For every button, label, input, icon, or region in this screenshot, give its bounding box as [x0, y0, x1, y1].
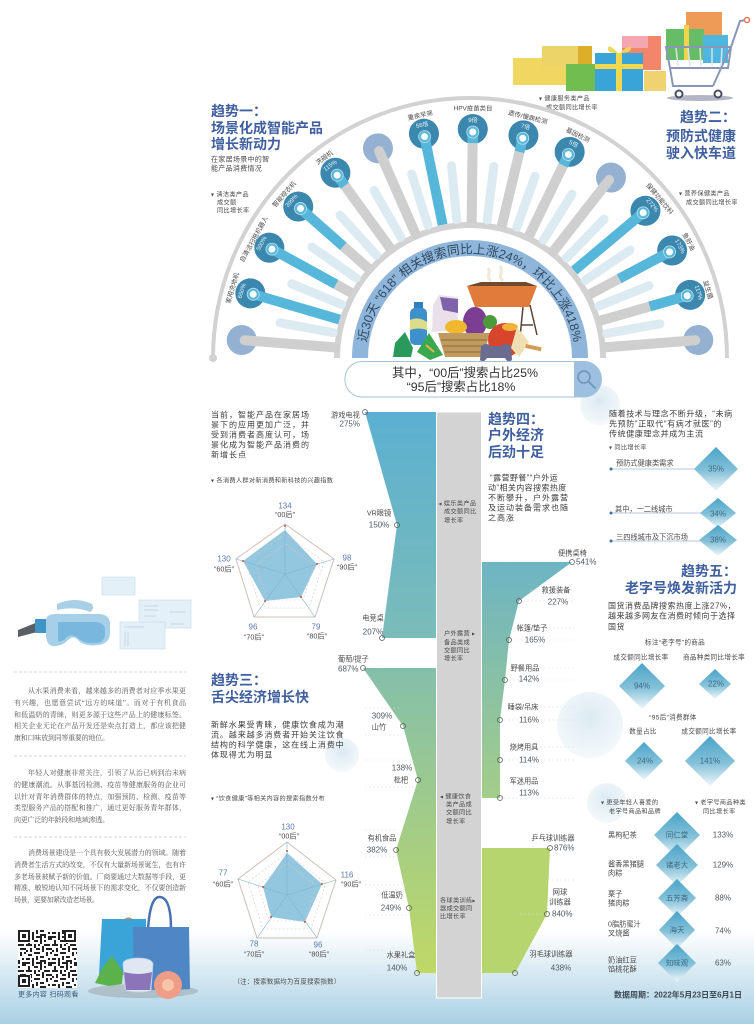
metrics: post-95 consumers: 141% [700, 756, 720, 766]
text: preventive health intro: 传统健康理念并成为主流 [609, 428, 704, 438]
spoke: 重疾早筛 56倍: 重疾早筛 [407, 108, 434, 122]
table headers: brands: ▾ 老字号商品种类 [695, 798, 746, 806]
text: trend 1 subtitle [211, 154, 269, 172]
metric: preventive health 35%: 预防式健康类需求 [616, 458, 674, 468]
text: commentary paragraph 3: 精准、敏锐地认知不同场景下的需求变化，不仅要创造新 [14, 883, 186, 893]
title: trend 1: 趋势一： [211, 103, 267, 119]
note: （注：搜索数据均为百度搜索指数） [233, 976, 341, 986]
illustration: barbecue, fruit basket and outdoor goods [393, 266, 542, 362]
search box: “95后”搜索占比18% [407, 379, 515, 394]
chart: healthy food funnel: 687% [338, 664, 358, 674]
text: trend 4 body: 及运动装备需求也随 [488, 502, 569, 512]
radar chart: interest index: 98 [343, 554, 352, 562]
column label: healthy food: 类产品成 [446, 800, 472, 808]
text: smart product intro [211, 410, 310, 460]
title: trend 3: 舌尖经济增长快 [211, 689, 309, 705]
spoke: 重疾早筛 56倍: 56倍 [415, 120, 429, 130]
chart: outdoor camping funnel: 睡袋/吊床 [508, 702, 538, 712]
spoke: 基因检测 5倍: 5倍 [568, 138, 580, 149]
ball and paddle [488, 323, 522, 357]
chart: healthy food funnel: 138% [392, 764, 412, 772]
milk carton [432, 295, 458, 332]
text: trend 4 body: 不断攀升，户外露营 [488, 492, 569, 502]
fan chart: product growth rates [209, 98, 727, 362]
text: smart product intro: 受到消费者高度认可，场 [211, 430, 310, 440]
chart: healthy food funnel: 枇杷 [394, 776, 408, 784]
table row: 海天: 叉烧酱 [608, 928, 630, 938]
spoke: 洗碗机 115%: 115% [323, 159, 339, 173]
title: trend 4: 趋势四： [488, 411, 544, 427]
search box: 其中，“00后”搜索占比25% [392, 365, 538, 380]
chart: healthy food funnel: 水果礼盒 [387, 950, 415, 960]
spoke: 益生菌 117% [596, 274, 717, 335]
text: commentary paragraph 3: 消费场景建设是一个具有极大发展潜力的领域。随着 [28, 848, 186, 857]
chart: ball trainers funnel: 训练器 [549, 898, 571, 906]
text: trend 3 body: 结构的科学健康，这在线上消费中 [211, 740, 344, 750]
spoke: HPV疫苗类目 9倍 [452, 103, 492, 223]
table row: 海天: 74% [715, 926, 731, 936]
text: trend 4 body: “露营野餐”“户外运 [490, 472, 558, 482]
spoke: 益生菌 117%: 益生菌 [701, 279, 716, 301]
divider lines, left column [14, 672, 186, 837]
spoke: 鱼肝油 173%: 鱼肝油 [680, 231, 697, 252]
metric: preventive health 35%: 35% [708, 464, 724, 474]
spoke: 智能晾衣机 399% [270, 179, 380, 281]
chart: outdoor camping funnel: 227% [548, 598, 568, 606]
spoke: 洗碗机 115%: 洗碗机 [314, 148, 335, 167]
metric: lower-tier cities 38% [610, 525, 737, 556]
text: preventive health intro: 先预防”正取代“有病才就医”的 [609, 418, 722, 428]
metrics: post-95 consumers: “95后”消费群体 [649, 712, 697, 722]
column label: entertainment: 成交额同比 [444, 508, 476, 516]
metrics: time-honored brand goods: 94% [634, 682, 650, 690]
text: smart product intro: 景下的应用更加广泛，并 [211, 420, 310, 430]
radar chart: interest index [214, 502, 358, 642]
metrics: time-honored brand goods: 成交额同比增长率 [613, 652, 669, 662]
metrics: time-honored brand goods: 标注“老字号”的商品 [645, 638, 705, 646]
spoke: HPV疫苗类目 9倍: 9倍 [468, 116, 478, 124]
chart: healthy food funnel: 低温奶 [381, 890, 403, 900]
chart: ball trainers funnel: 876% [554, 844, 574, 852]
illustration: gifts and shopping cart [513, 12, 750, 101]
text: commentary paragraph 2: 类型服务产品的搭配和推广，通过更好服务青年群体， [14, 803, 186, 813]
text: commentary paragraph 2: 的健康潮流。从事基因检测、疫苗等健康服务的企业可 [14, 780, 186, 789]
chart: ball trainers funnel: 羽毛球训练器 [529, 950, 573, 958]
title: trend 1: 增长新动力 [211, 136, 281, 152]
chart: entertainment products funnel: 游戏电视 [331, 410, 360, 420]
column label: entertainment [438, 500, 476, 524]
chart: healthy food funnel: 249% [381, 904, 401, 912]
page background gradient [0, 930, 754, 1024]
metrics: post-95 consumers: 数量占比 [629, 726, 657, 736]
column label: healthy food [440, 792, 472, 826]
data period: 数据周期：2022年5月23日至6月1日 [614, 990, 742, 1000]
radar chart: interest index: “70后” [244, 632, 265, 642]
metrics: time-honored brand goods [613, 638, 745, 709]
radar chart: interest index: 134 [278, 502, 292, 510]
table row: 海天 [608, 911, 731, 949]
column label: healthy food: 增长率 [446, 818, 465, 826]
chart: ball trainers funnel: 网球 [553, 888, 567, 896]
chart: ball trainers funnel [482, 834, 576, 976]
table row: 五芳斋: 五芳斋 [666, 894, 689, 902]
radar chart: food search index: 130 [281, 822, 295, 832]
text: trend 3 body: 新鲜水果受青睐，健康饮食成为潮 [211, 720, 344, 730]
illustration: shopping bags with zongzi, milk tea and pastry [88, 897, 198, 999]
column label: outdoor: 增长率 [444, 654, 463, 662]
metric: tier 1-2 cities 34%: 其中，一二线城市 [615, 504, 673, 514]
column label: ball trainers: 器成交额同 [440, 904, 472, 912]
title: trend 2 [666, 109, 736, 161]
legend: cleaning products: 同比增长率 [217, 206, 249, 214]
spoke: empty gray 2 [358, 129, 429, 240]
table row: 同仁堂 [608, 812, 733, 858]
spoke: 自清洁扫拖机器人 500% [237, 214, 364, 315]
chart: outdoor camping funnel: 帐篷/垫子 [517, 624, 547, 632]
table row: 同仁堂: 133% [713, 830, 733, 840]
text: preventive health intro: 随着技术与理念不断升级，“未病 [609, 408, 733, 418]
text: commentary paragraph 1: 相关企业无论在产品开发还是卖点打造上，都应该把健 [14, 721, 186, 731]
text: commentary paragraph 1: 康和口味放到同等重要的地位。 [14, 733, 109, 742]
table headers: brands: ▾ 更受年轻人喜爱的 [601, 798, 658, 806]
chart: entertainment products funnel: 275% [340, 420, 360, 428]
table row: 同仁堂: 同仁堂 [666, 830, 688, 840]
radar chart: interest index: “00后” [275, 510, 296, 519]
table row: 海天: 0脂肪蜜汁 [608, 920, 641, 928]
QR caption: 更多内容 扫码观看 [18, 990, 79, 998]
table row: 知味观 [608, 944, 731, 982]
metrics: time-honored brand goods: 商品种类同比增长率 [683, 652, 745, 662]
headline band: curved search growth text: 近30天 “618” 相关搜索同比上涨24%，环比上涨418% [356, 243, 582, 342]
decorative pale circles [325, 385, 627, 823]
text: commentary paragraph 2: 年轻人对健康非常关注，引领了从治已病到治未病 [28, 768, 186, 778]
legend: growth rate: ▾ 同比增长率 [609, 444, 647, 452]
spoke: 家用洗地机 650% [223, 271, 344, 335]
table row: 诸老大: 肉粽 [608, 868, 622, 878]
chart: ball trainers funnel: 840% [552, 910, 572, 918]
chart: ball trainers funnel: 438% [551, 964, 571, 972]
radar chart: food search index: “80后” [309, 950, 330, 958]
text: commentary paragraph 1: 和低温奶的青睐，则更多源于这些产品上的健康标签。 [14, 710, 186, 720]
chart: outdoor camping funnel: 军迷用品 [510, 776, 538, 786]
spoke: 遗传/慢病检测 7倍: 7倍 [520, 122, 531, 132]
column label: outdoor: 户外露营 ▸ [444, 630, 475, 638]
table row: 知味观: 馅桃花酥 [608, 964, 637, 974]
radar chart: food search index: “00后” [279, 832, 300, 840]
text: trend 3 body: 体现得尤为明显 [211, 750, 273, 760]
text: trend 5 body: 国货 [608, 622, 625, 632]
text: commentary paragraph 2: 以针对青年消费群体的特点，加强预防、检测、疫苗等 [14, 792, 186, 802]
title: trend 5: 趋势五： [681, 563, 737, 579]
spoke: 智能晾衣机 399%: 智能晾衣机 [270, 179, 298, 209]
column label: ball trainers [440, 896, 476, 920]
table row: 诸老大: 129% [713, 860, 733, 870]
chart: outdoor camping funnel: 114% [519, 756, 539, 764]
metrics: post-95 consumers [625, 712, 737, 786]
spoke: empty gray 3 [541, 156, 632, 261]
chart: outdoor camping funnel: 116% [519, 716, 539, 724]
chart: healthy food funnel: 葡萄/提子 [338, 654, 369, 664]
text: commentary paragraph 2: 向更广泛的年龄段和地域渗透。 [14, 815, 109, 824]
metrics: post-95 consumers: 24% [637, 756, 653, 766]
text: commentary paragraph 3 [14, 848, 186, 905]
spoke: 基因检测 5倍 [515, 124, 593, 243]
column label: entertainment: 增长率 [444, 516, 463, 524]
chart: outdoor camping funnel: 便携桌椅 [558, 548, 587, 558]
text: trend 5 body [608, 600, 736, 632]
text: commentary paragraph 3: 多老场景被赋予新的价值。厂商要通过大数据等手段，更 [14, 872, 186, 882]
inner arc [337, 225, 603, 358]
metric: preventive health 35% [610, 447, 738, 491]
table row: 诸老大: 酱香黑猪腿 [608, 860, 644, 868]
chart: outdoor camping funnel: 541% [576, 558, 596, 566]
table row: 海天: 海天 [670, 926, 685, 934]
text: trend 1 subtitle: 能产品消费情况 [211, 164, 262, 172]
spoke: 保健功能饮料 272%: 272% [644, 198, 659, 214]
chart: healthy food funnel [338, 654, 436, 976]
text: trend 1 subtitle: 在家居场景中的智 [211, 154, 269, 164]
chart: entertainment products funnel: 150% [369, 520, 389, 530]
spoke: 家用洗地机 650%: 家用洗地机 [223, 271, 241, 305]
legend: cleaning products: ▾ 清洁类产品 [211, 190, 249, 198]
radar chart: food search index: 116 [341, 870, 354, 880]
metric: lower-tier cities 38%: 三四线城市及下沉市场 [616, 532, 688, 542]
table row: 同仁堂: 黑枸杞茶 [608, 830, 637, 840]
text: trend 4 body: 动”相关内容搜索热度 [488, 482, 567, 492]
chart: healthy food funnel: 有机食品 [368, 834, 396, 842]
text: trend 5 body: 越来越多网友在消费时倾向于选择 [608, 610, 736, 620]
radar chart: food search index: 78 [250, 940, 259, 948]
chart: healthy food funnel: 382% [367, 846, 387, 854]
column label: entertainment: ◂ 娱乐类产品 [438, 500, 476, 508]
table row: 知味观: 63% [715, 958, 731, 968]
radar chart: food search index: 96 [314, 940, 323, 950]
table row: 五芳斋: 猪肉粽 [608, 898, 630, 908]
legend: cleaning products: 成交额 [217, 198, 237, 206]
spoke: 自清洁扫拖机器人 500%: 500% [256, 235, 269, 252]
spoke: 自清洁扫拖机器人 500%: 自清洁扫拖机器人 [237, 214, 270, 264]
chart: outdoor camping funnel: 142% [519, 674, 539, 684]
water bottle [410, 308, 427, 345]
table row: 知味观: 奶油红豆 [608, 956, 637, 964]
text: commentary paragraph 3: 消费者生活方式的改变，不仅有大量新场景诞生，也有许 [14, 860, 186, 870]
spoke: 益生菌 117%: 117% [693, 285, 703, 301]
radar chart: food search index: “60后” [213, 880, 234, 888]
column label: outdoor: 备品类成 [444, 638, 470, 646]
text: commentary paragraph 1: 有兴趣，也愿意尝试“远方的味道”。而对于有机食品 [14, 698, 186, 708]
legend: health service products: 成交额同比增长率 [546, 104, 598, 112]
chart: entertainment products funnel: 电竞桌 [362, 614, 384, 622]
title: trend 2: 驶入快车道 [666, 145, 736, 161]
column label: ball trainers: 各球类训练▸ [440, 896, 476, 904]
radar heading: interest index: ▾ 各消费人群对新消费和新科技的兴趣指数 [211, 476, 334, 484]
spoke: HPV疫苗类目 9倍: HPV疫苗类目 [454, 103, 492, 113]
chart: outdoor camping funnel: 救援装备 [542, 586, 570, 594]
gamepad [480, 344, 512, 362]
table headers: brands [601, 798, 746, 816]
radar chart: food search index: 77 [219, 868, 228, 878]
title: trend 4 [488, 411, 544, 460]
metrics: post-95 consumers: 成交额同比增长率 [681, 726, 737, 736]
icon: magnifier [574, 361, 602, 397]
radar heading: food search index: ▾ “饮食健康”等相关内容的搜索指数分布 [211, 794, 325, 802]
outer arc [213, 98, 727, 358]
column label: outdoor [444, 630, 475, 662]
chart: entertainment products funnel: VR眼镜 [367, 508, 391, 518]
QR code [18, 930, 77, 988]
chart: ball trainers funnel: 乒乓球训练器 [531, 834, 575, 842]
spoke: 遗传/慢病检测 7倍 [482, 108, 548, 231]
metric: lower-tier cities 38%: 38% [710, 536, 726, 544]
title: trend 3 [211, 672, 309, 705]
column label: outdoor: 交额同比 [444, 646, 470, 654]
basket [438, 333, 490, 357]
text: commentary paragraph 3: 场景，更要加紧改造老场景。 [14, 895, 99, 905]
radar chart: food search index: “70后” [244, 950, 265, 958]
chart: outdoor camping funnel: 野餐用品 [511, 664, 539, 672]
title: trend 3: 趋势三： [211, 672, 267, 688]
spoke: empty gray 4 [603, 324, 714, 362]
table row: 诸老大 [608, 844, 733, 886]
table row: 五芳斋 [608, 879, 731, 917]
text: commentary paragraph 2 [14, 768, 186, 824]
title: trend 1: 场景化成智能产品 [211, 120, 323, 136]
spoke: 遗传/慢病检测 7倍: 遗传/慢病检测 [507, 108, 548, 126]
chart: outdoor camping funnel [482, 548, 596, 800]
pale short spokes [280, 166, 660, 333]
table headers: brands: 老字号商品和品牌 [609, 808, 661, 816]
illustration: VR goggles and floating screens [18, 577, 191, 649]
funnel column: gray center bar [436, 412, 482, 998]
chart: healthy food funnel: 140% [387, 964, 407, 972]
column label: healthy food: 交额同比 [446, 808, 472, 816]
text: smart product intro: 景化成为智能产品消费的 [211, 440, 310, 450]
spoke: 洗碗机 115% [309, 145, 403, 258]
text: trend 4 body: 之高涨 [488, 512, 515, 522]
zongzi [393, 332, 413, 357]
radar chart: interest index: “60后” [214, 564, 235, 574]
table row: 知味观: 知味观 [666, 958, 689, 968]
text: preventive health intro [609, 408, 733, 438]
radar chart: food search index: “90后” [341, 880, 362, 888]
table row: 五芳斋: 栗子 [608, 890, 622, 898]
text: trend 3 body [211, 720, 344, 760]
column label: ball trainers: 比增长率 [440, 912, 466, 920]
spoke: 鱼肝油 173%: 173% [673, 239, 686, 255]
spoke: 重疾早筛 56倍 [405, 108, 457, 228]
chart: healthy food funnel: 309% [372, 712, 392, 720]
title: trend 5: 老字号焕发新活力 [625, 580, 737, 596]
search box [345, 361, 602, 397]
barbecue [467, 286, 537, 307]
chart: entertainment products funnel [331, 410, 436, 640]
title: trend 2: 趋势二： [680, 109, 736, 125]
spoke: 家用洗地机 650%: 650% [238, 282, 248, 299]
legend: cleaning products [211, 190, 249, 214]
column label: healthy food: ◂ 健康饮食 [440, 792, 472, 800]
legend: nutrition products: 成交额同比增长率 [686, 198, 738, 206]
chart: outdoor camping funnel: 113% [519, 788, 539, 798]
title: trend 2: 预防式健康 [666, 128, 736, 144]
text: trend 5 body: 国货消费品牌搜索热度上涨27%， [608, 600, 736, 610]
legend: health service products [539, 94, 598, 112]
legend: health service products: ▾ 健康服务类产品 [539, 94, 590, 102]
table row: 诸老大: 诸老大 [666, 860, 689, 870]
table row: 五芳斋: 88% [715, 894, 731, 902]
radar chart: interest index: “80后” [307, 632, 328, 640]
radar chart: interest index: 96 [249, 622, 258, 632]
text: commentary paragraph 1 [14, 686, 186, 742]
text: trend 3 body: 流。越来越多消费者开始关注饮食 [211, 730, 344, 740]
legend: nutrition products: ▾ 营养保健类产品 [679, 190, 730, 198]
spoke: 保健功能饮料 272%: 保健功能饮料 [644, 181, 676, 217]
table headers: brands: 同比增长率 [703, 808, 735, 816]
spoke: 保健功能饮料 272% [562, 181, 676, 286]
metric: tier 1-2 cities 34%: 34% [710, 510, 726, 518]
radar chart: interest index: 79 [312, 622, 321, 632]
title: trend 1 [211, 103, 323, 152]
chart: healthy food funnel: 山竹 [372, 722, 386, 732]
text: smart product intro: 新增长点 [211, 450, 247, 460]
spoke: empty gray 1 [226, 324, 337, 362]
title: trend 5 [625, 563, 737, 596]
grapes and fruit [463, 307, 487, 337]
radar chart: interest index: “90后” [337, 562, 358, 572]
legend: nutrition products [679, 190, 738, 206]
metrics: time-honored brand goods: 22% [708, 680, 724, 688]
spoke: 智能晾衣机 399%: 399% [285, 193, 300, 209]
text: trend 4 body [488, 472, 569, 522]
text: commentary paragraph 1: 从水果消费来看，越来越多的消费者对应季水果更 [28, 686, 186, 696]
spoke: 基因检测 5倍: 基因检测 [564, 125, 591, 144]
chart: outdoor camping funnel: 165% [525, 636, 545, 644]
radar chart: interest index: 130 [217, 554, 231, 564]
metric: tier 1-2 cities 34% [610, 498, 736, 528]
chart: entertainment products funnel: 207% [363, 628, 383, 636]
text: smart product intro: 当前，智能产品在家居场 [211, 410, 310, 420]
title: trend 4: 户外经济 [488, 427, 544, 443]
spoke: 鱼肝油 173% [582, 226, 700, 308]
chart: outdoor camping funnel: 烧烤用具 [510, 742, 538, 752]
radar chart: food search index [213, 822, 362, 958]
title: trend 4: 后劲十足 [488, 444, 544, 460]
